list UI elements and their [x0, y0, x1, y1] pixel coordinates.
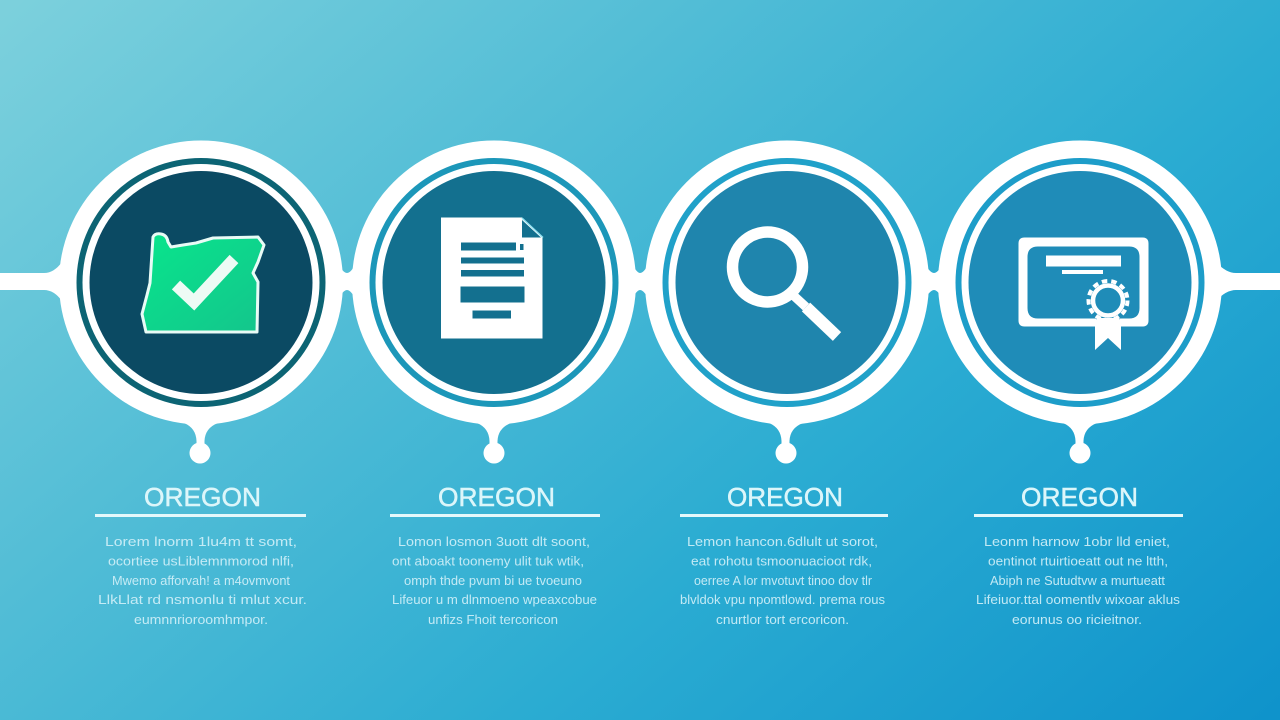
step 4: certificate: [938, 140, 1222, 627]
body text: [976, 534, 1181, 627]
icon: certificate with seal: [1018, 238, 1148, 350]
heading: Oregon: OREGON: [1021, 482, 1138, 512]
heading: Oregon: OREGON: [144, 482, 261, 512]
body text: oentinot rtuirtioeatt out ne ltth,: [988, 554, 1168, 568]
body text: cnurtlor tort ercoricon.: [716, 612, 849, 627]
body text: blvldok vpu npomtlowd. prema rous: [680, 592, 885, 607]
body text: Leonm harnow 1obr lld eniet,: [984, 534, 1170, 549]
step 2: document: [352, 140, 636, 627]
body text: Lemon hancon.6dlult ut sorot,: [687, 534, 878, 549]
icon: magnifying glass: [732, 232, 837, 336]
rule: [680, 514, 888, 517]
body text: unfizs Fhoit tercoricon: [428, 612, 558, 627]
icon: Oregon map with check mark: [142, 234, 264, 332]
timeline connector: [0, 258, 1280, 305]
body text: eat rohotu tsmoonuacioot rdk,: [691, 554, 872, 568]
body text: eorunus oo ricieitnor.: [1012, 612, 1142, 627]
icon: document: [441, 218, 543, 338]
body text: Lorem lnorm 1lu4m tt somt,: [105, 534, 297, 549]
body text: eumnnrioroomhmpor.: [134, 612, 268, 627]
body text: ont aboakt toonemy ulit tuk wtik,: [392, 554, 584, 568]
rule: [974, 514, 1183, 517]
body text: [98, 534, 307, 627]
body text: ocortiee usLiblemnmorod nlfi,: [108, 554, 294, 568]
body text: Lifeiuor.ttal oomentlv wixoar aklus: [976, 592, 1181, 607]
body text: [392, 534, 597, 627]
step 3: magnifier: [645, 140, 929, 627]
body text: Lifeuor u m dlnmoeno wpeaxcobue: [392, 592, 597, 607]
step 1 badge: [59, 140, 343, 464]
rule: [95, 514, 306, 517]
body text: oerree A lor mvotuvt tinoo dov tlr: [694, 573, 873, 588]
step 4 badge: [938, 140, 1222, 464]
heading: Oregon: OREGON: [727, 482, 843, 512]
body text: [680, 534, 885, 627]
rule: [390, 514, 600, 517]
body text: Lomon losmon 3uott dlt soont,: [398, 534, 590, 549]
body text: Mwemo afforvah! a m4ovmvont: [112, 573, 290, 588]
step 1: Oregon check: [59, 140, 343, 627]
body text: LlkLlat rd nsmonlu ti mlut xcur.: [98, 592, 307, 607]
body text: omph thde pvum bi ue tvoeuno: [404, 573, 582, 588]
heading: Oregon: OREGON: [438, 482, 555, 512]
body text: Abiph ne Sutudtvw a murtueatt: [990, 573, 1165, 588]
step 2 badge: [352, 140, 636, 464]
step 3 badge: [645, 140, 929, 464]
